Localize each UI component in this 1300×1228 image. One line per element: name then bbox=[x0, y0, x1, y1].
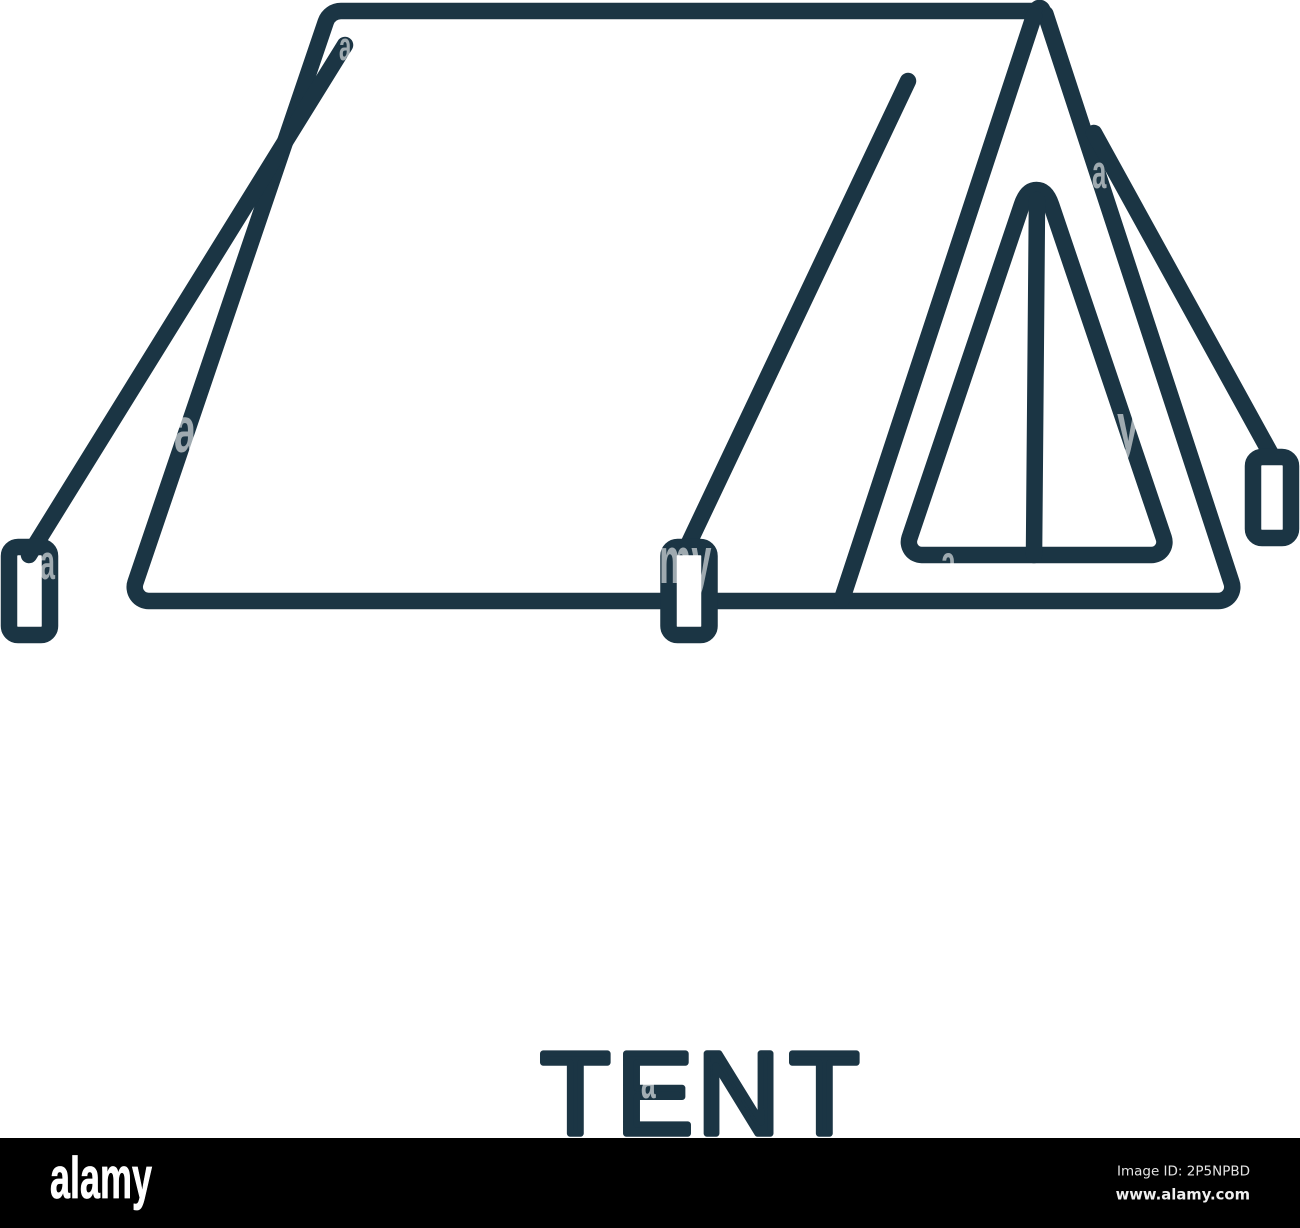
watermark a, tent edge: a bbox=[174, 396, 196, 466]
door front edge bbox=[842, 16, 1034, 599]
alamy logo: alamy bbox=[50, 1146, 152, 1211]
watermark y, door edge: y bbox=[1117, 390, 1139, 464]
middle guy rope bbox=[688, 81, 908, 545]
image id: Image ID: 2P5NPBD bbox=[1117, 1164, 1250, 1180]
tent body outline bbox=[135, 11, 1232, 601]
watermark a on title: a bbox=[641, 1056, 656, 1109]
watermark fragments bbox=[40, 24, 1139, 598]
tent door bbox=[909, 190, 1164, 555]
watermark a, door base: a bbox=[941, 537, 956, 590]
watermark a, left peg: a bbox=[40, 536, 56, 590]
watermark a, right rope: a bbox=[1092, 147, 1107, 199]
door centre seam bbox=[1034, 200, 1037, 555]
icon: tent bbox=[9, 8, 1291, 635]
watermark a, rope tip: a bbox=[339, 24, 352, 69]
left peg bbox=[9, 547, 50, 635]
watermark my, middle peg: my bbox=[659, 525, 712, 598]
website: www.alamy.com bbox=[1116, 1186, 1250, 1204]
title: TENT: TENT bbox=[541, 1029, 859, 1159]
right guy rope bbox=[1094, 133, 1272, 456]
footer bar bbox=[0, 1138, 1300, 1228]
middle peg bbox=[668, 547, 710, 635]
tent apex bbox=[1036, 8, 1042, 14]
right peg bbox=[1253, 457, 1291, 538]
left guy rope bbox=[29, 45, 345, 555]
